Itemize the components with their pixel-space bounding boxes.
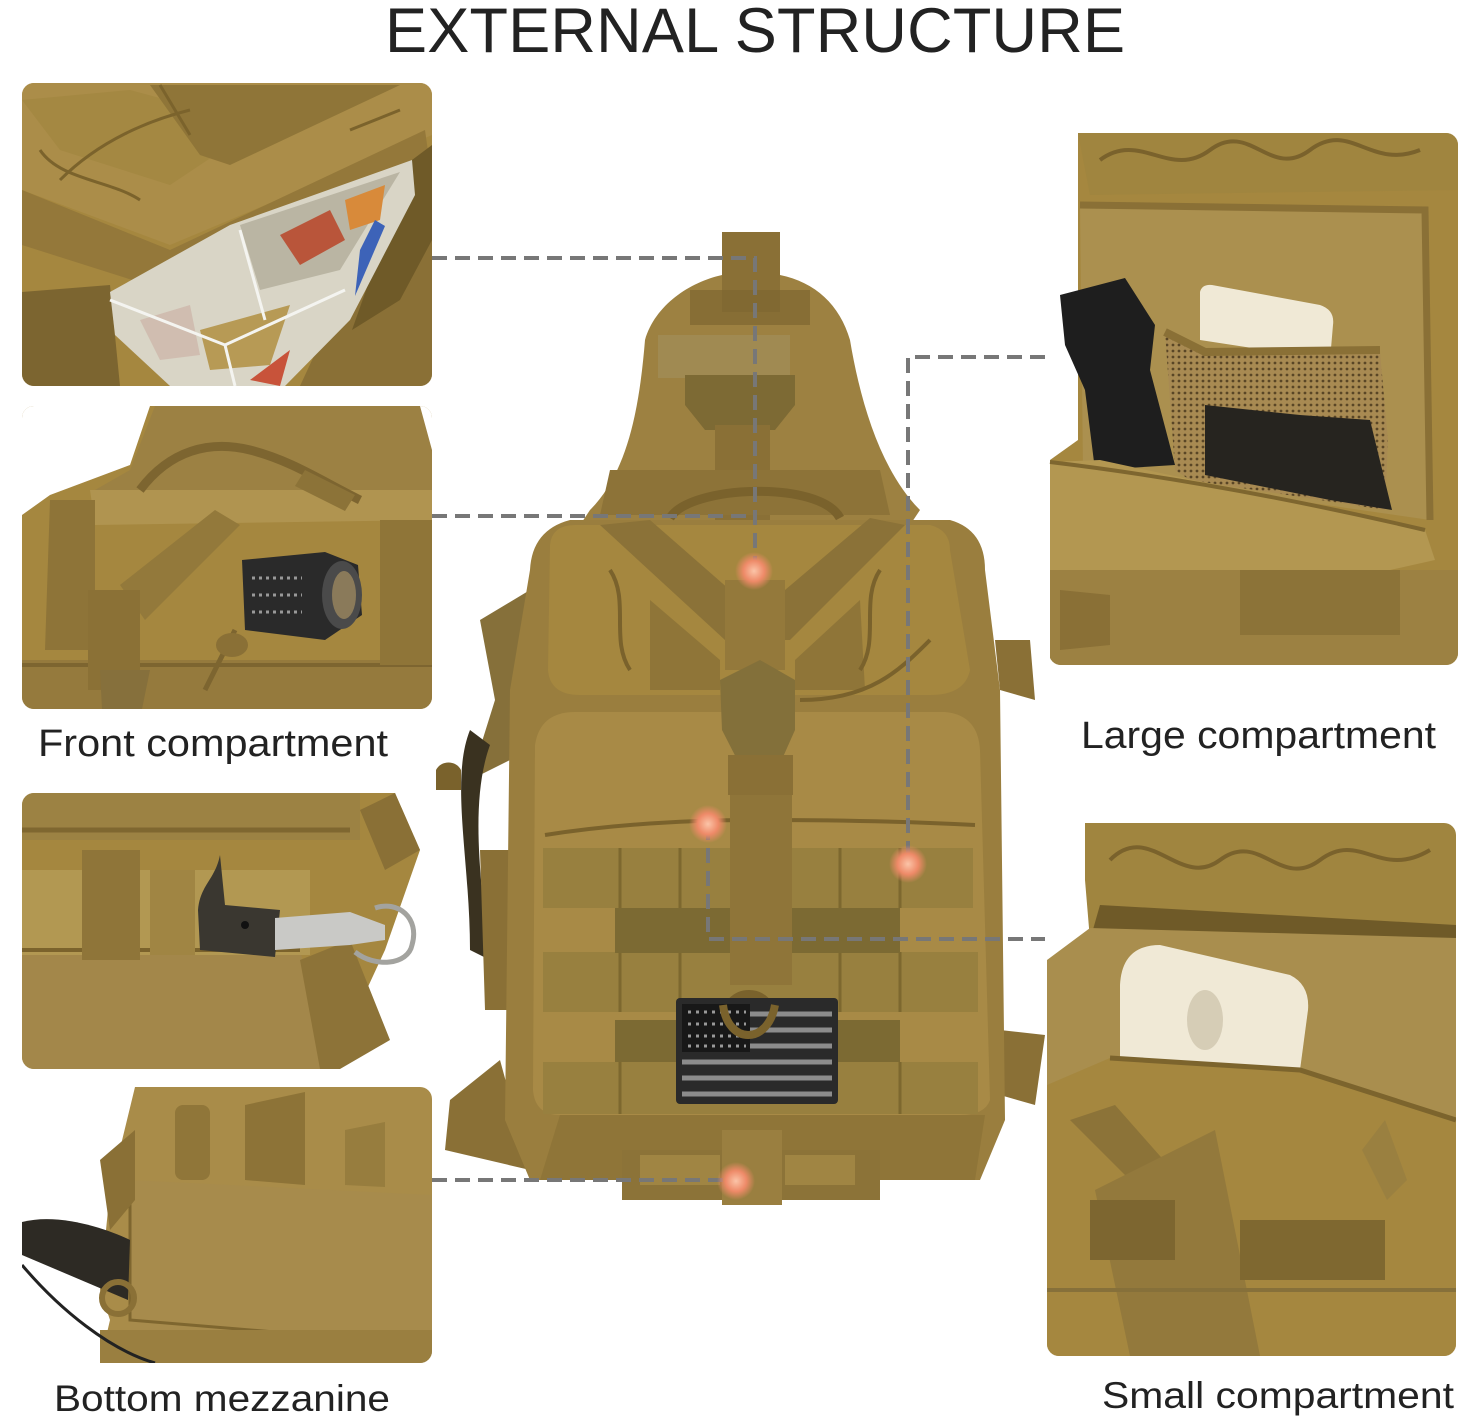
dashed connector: small compartment [708,825,1045,939]
side straps [470,590,530,780]
icon: phone in front pocket [1120,945,1308,1070]
dashed connector: bottom mezzanine [432,1178,735,1182]
handle [670,491,840,518]
icon: black handle [22,1219,130,1300]
main front pocket [533,712,990,1115]
marker dot: large compartment [889,845,927,883]
dashed connector: top pocket [432,258,755,570]
panel: front compartment photo [22,406,432,709]
panel: large compartment photo [1049,133,1458,665]
label: front compartment: Front compartment [38,723,388,765]
icon: strap buckle [1070,1105,1161,1175]
panel: small compartment photo [1047,823,1456,1356]
icon: flashlight [242,552,362,640]
label: small compartment: Small compartment [1102,1375,1455,1416]
MOLLE webbing rows [543,848,973,908]
icon: fish gripper tool [198,855,414,962]
center strap and buckle [725,580,785,670]
icon: phone in pocket [1200,284,1334,348]
panel: top pocket with tackle box [22,83,432,386]
bag body [505,520,1005,1180]
panel: side pocket with pliers [22,793,432,1069]
bottom strap [622,1150,880,1200]
marker dot: small compartment [689,805,727,843]
label: bottom mezzanine: Bottom mezzanine [54,1378,390,1419]
panel: bottom mezzanine photo [22,1087,432,1363]
icon: mesh pocket [1165,332,1388,510]
dashed connector: front compartment [432,514,755,518]
icon: black wallet [1205,405,1392,510]
dashed connector: large compartment [908,357,1045,862]
marker dot: bottom mezzanine [717,1162,755,1200]
backpack main illustration [436,232,1045,1205]
icon: transparent tackle box [110,160,415,386]
upper pocket [548,525,970,695]
back shoulder pad [570,232,920,540]
icon: flashlight [1060,278,1175,470]
icon: black US flag patch [676,998,838,1104]
marker dot: top pocket [735,552,773,590]
label: large compartment: Large compartment [1081,715,1436,757]
